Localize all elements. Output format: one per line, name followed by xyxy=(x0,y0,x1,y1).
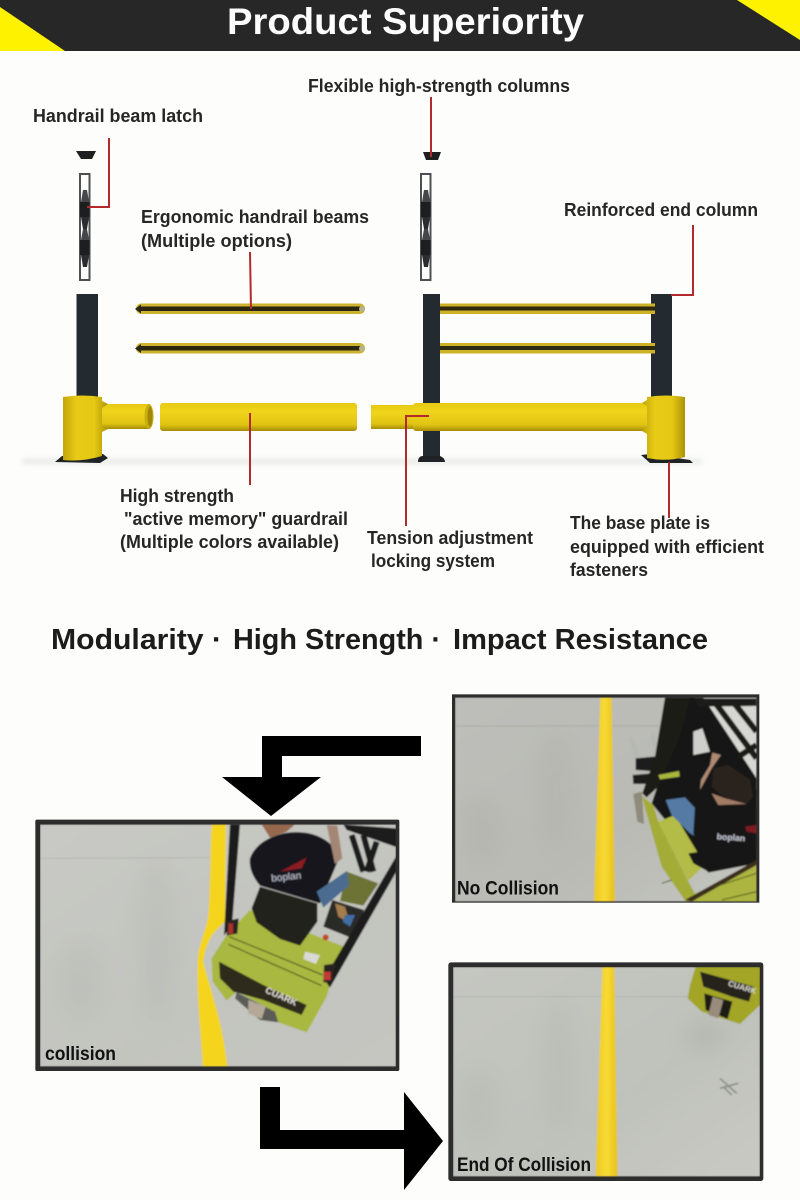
label: tension adjustment: locking system xyxy=(371,551,495,571)
label: reinforced end column: Reinforced end column xyxy=(564,200,758,220)
title: Product Superiority xyxy=(227,1,584,42)
arrow: down-right xyxy=(260,1087,443,1190)
label: ergonomic handrail beams: Ergonomic handrail beams xyxy=(141,207,369,227)
loose guardrail tube xyxy=(160,403,357,431)
label: base plate xyxy=(570,513,764,580)
right yellow corner xyxy=(737,0,800,40)
caption: collision: collision xyxy=(45,1044,116,1065)
arrow: down-left xyxy=(222,736,421,816)
subheading xyxy=(51,624,708,656)
callout leader lines xyxy=(87,97,693,526)
header banner xyxy=(0,0,800,51)
icon: beam latch right xyxy=(423,152,441,160)
label: high strength guardrail: "active memory" guardrail xyxy=(124,509,348,529)
label: tension adjustment xyxy=(367,528,533,571)
label: base plate: The base plate is xyxy=(570,513,710,533)
flexible column right xyxy=(421,174,430,280)
photo panel: collision: CUARK xyxy=(264,985,299,1008)
subheading: Modularity · xyxy=(51,624,222,656)
ground shadow xyxy=(22,460,702,463)
subheading: High Strength · xyxy=(233,624,441,656)
label: ergonomic handrail beams: (Multiple options) xyxy=(141,231,292,251)
flexible column left xyxy=(80,174,90,280)
assembled barrier xyxy=(371,294,693,463)
label: base plate: fasteners xyxy=(570,560,648,580)
subheading: Impact Resistance xyxy=(453,624,708,656)
label: flexible columns: Flexible high-strength columns xyxy=(308,76,570,96)
caption: end of collision: End Of Collision xyxy=(457,1155,591,1176)
label: high strength guardrail xyxy=(120,486,348,552)
caption: no collision: No Collision xyxy=(457,879,559,900)
label: high strength guardrail: High strength xyxy=(120,486,234,506)
photo panel: collision: boplan xyxy=(271,871,302,885)
left base assembly xyxy=(55,294,154,463)
loose handrail beams xyxy=(135,304,365,354)
photo panel: end of collision xyxy=(448,962,763,1181)
guardrail exploded diagram xyxy=(22,97,702,526)
photo panel: no collision xyxy=(452,694,759,903)
photo panel: collision xyxy=(35,820,399,1071)
label: tension adjustment: Tension adjustment xyxy=(367,528,533,548)
icon: beam latch left xyxy=(76,151,96,159)
photo panel: end of collision: CUARK xyxy=(727,979,758,996)
label: ergonomic handrail beams xyxy=(141,207,369,251)
label: high strength guardrail: (Multiple colors available) xyxy=(120,532,339,552)
label: base plate: equipped with efficient xyxy=(570,537,764,557)
label: handrail beam latch: Handrail beam latch xyxy=(33,106,203,126)
photo panel: no collision: boplan xyxy=(717,831,746,843)
left yellow corner xyxy=(0,7,65,51)
